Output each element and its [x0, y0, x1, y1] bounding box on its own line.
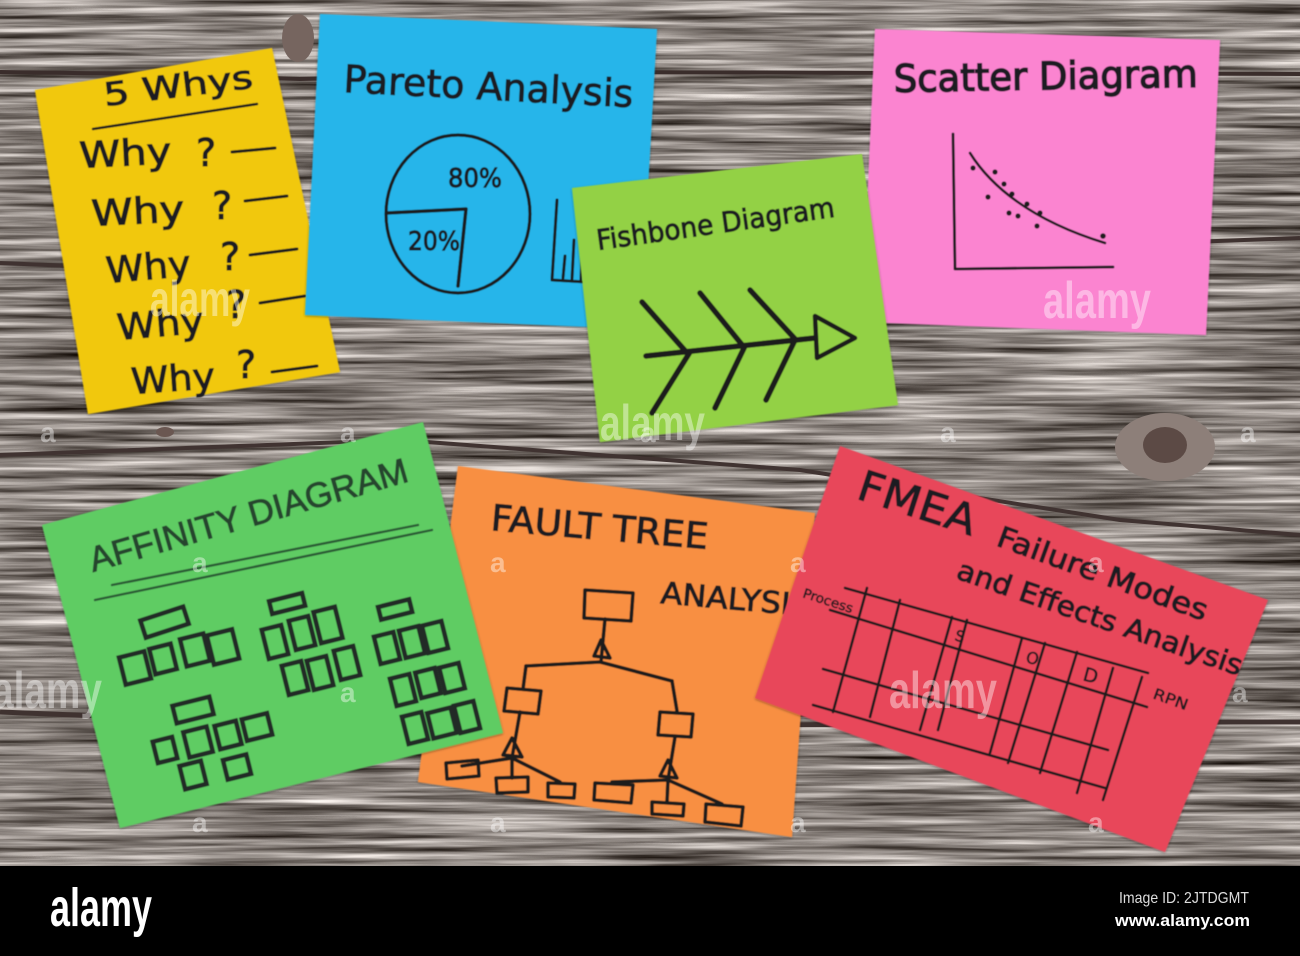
sticky note: FMEA: [755, 446, 1268, 852]
fault tree drawing: [446, 590, 743, 826]
why list: Why: [90, 189, 185, 235]
heading: Affinity Diagram: AFFINITY DIAGRAM: [84, 451, 412, 580]
FMEA table: [801, 587, 1191, 800]
alamy watermarks: a: [490, 807, 506, 838]
alamy watermarks: a: [1240, 417, 1256, 448]
affinity boxes: [119, 593, 480, 789]
heading: Fishbone Diagram: Fishbone Diagram: [594, 191, 837, 257]
pie chart 80/20: 80%: [448, 164, 502, 194]
alamy watermarks: a: [1088, 547, 1104, 578]
FMEA table: Process: [801, 587, 855, 617]
sticky note: Pareto Analysis: [305, 14, 657, 329]
alamy watermarks: a: [40, 417, 56, 448]
alamy watermarks: a: [790, 547, 806, 578]
alamy watermarks: a: [640, 417, 656, 448]
alamy watermarks: a: [940, 417, 956, 448]
heading: Scatter Diagram: Scatter Diagram: [893, 52, 1198, 101]
why list: ?: [212, 184, 232, 228]
heading: 5 Whys: 5 Whys: [101, 58, 255, 114]
small bar chart: [552, 200, 586, 282]
sticky note: Scatter Diagram: [862, 29, 1220, 335]
why list: Why: [115, 301, 205, 349]
why list: ?: [196, 131, 216, 175]
why list: ?: [236, 343, 256, 387]
alamy watermarks: alamy: [150, 271, 250, 327]
alamy watermarks: alamy: [889, 662, 997, 720]
alamy watermarks: [0, 271, 1256, 838]
pie chart 80/20: [386, 135, 530, 293]
alamy watermarks: a: [1232, 677, 1248, 708]
alamy watermarks: a: [340, 417, 356, 448]
FMEA table: S: [953, 626, 967, 646]
why list: ?: [226, 283, 246, 327]
alamy watermarks: a: [1088, 807, 1104, 838]
why list: Why: [130, 356, 216, 403]
heading: Fault Tree: FAULT TREE: [489, 498, 710, 558]
why list: [78, 131, 317, 403]
heading: FMEA: FMEA: [852, 461, 983, 545]
alamy watermarks: alamy: [1043, 272, 1151, 330]
sticky note: Affinity Diagram: [42, 422, 503, 828]
scatter plot: [953, 134, 1113, 269]
why list: Why: [104, 244, 192, 292]
sticky note: Fault Tree Analysis: [418, 466, 815, 837]
alamy watermarks: alamy: [600, 395, 705, 451]
alamy watermarks: a: [192, 807, 208, 838]
why list: Why: [78, 131, 172, 177]
image id: Image ID: 2JTDGMT: [1119, 890, 1249, 907]
why list: ?: [220, 235, 240, 279]
pie chart 80/20: 20%: [408, 227, 460, 257]
fishbone drawing: [642, 290, 855, 413]
alamy watermarks: a: [340, 677, 356, 708]
website: www.alamy.com: [1114, 911, 1250, 930]
footer logo: alamy: alamy: [50, 878, 152, 938]
heading: Analysis: ANALYSIS: [659, 576, 812, 624]
alamy watermarks: a: [192, 547, 208, 578]
subheading: and Effects Analysis: and Effects Analysis: [953, 553, 1247, 682]
alamy watermarks: a: [790, 807, 806, 838]
footer bar: [0, 866, 1300, 956]
subheading: Failure Modes: Failure Modes: [993, 520, 1213, 628]
FMEA table: O: [1024, 648, 1041, 669]
sticky note: Fishbone Diagram: [572, 154, 898, 442]
alamy watermarks: a: [490, 547, 506, 578]
FMEA table: RPN: [1151, 685, 1191, 714]
heading: Pareto Analysis: Pareto Analysis: [343, 57, 634, 116]
sticky note: 5 Whys: [35, 48, 340, 414]
FMEA table: D: [1081, 664, 1101, 689]
